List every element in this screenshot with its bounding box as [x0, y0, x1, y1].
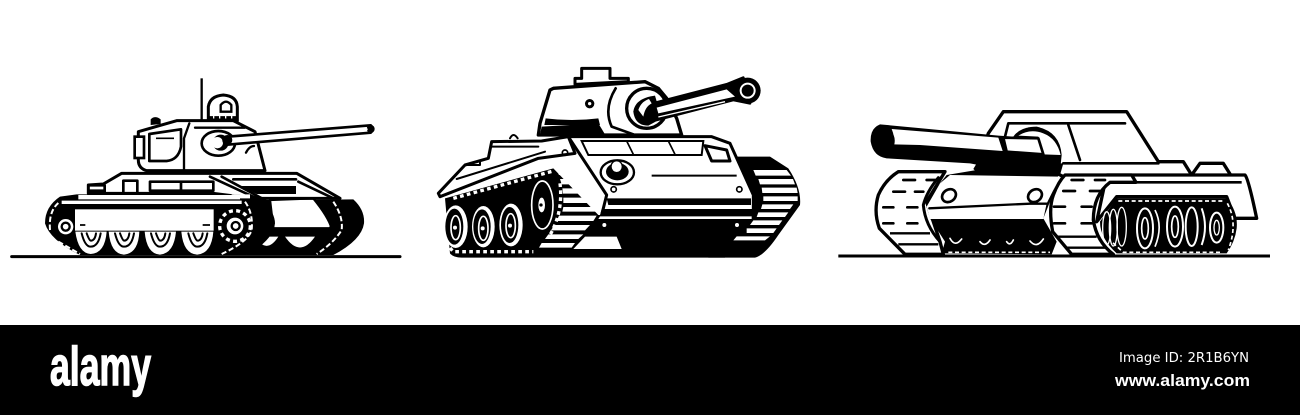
- side track links: [440, 171, 561, 252]
- drive sprocket: [532, 181, 553, 229]
- rear road wheels: [255, 237, 315, 247]
- white wedge under hull: [573, 237, 622, 249]
- side deck: [438, 135, 575, 197]
- tank 3: low tank destroyer with sloped superstructure: [838, 112, 1270, 256]
- mantlet: [627, 88, 667, 128]
- rear deck vent: [240, 186, 296, 194]
- right inner track: [1051, 175, 1136, 254]
- tank 2: three-quarter view heavy tank: [438, 68, 800, 258]
- rear track: [247, 199, 364, 255]
- hull deck: [88, 173, 340, 198]
- drive sprocket: [220, 211, 250, 241]
- gun and mantlet: [871, 124, 1062, 171]
- rear hull: [270, 198, 332, 228]
- right track: [708, 157, 800, 258]
- driver visor: [705, 146, 730, 161]
- cupola: [151, 95, 237, 125]
- glacis plate: [568, 137, 753, 233]
- idler wheel: [58, 219, 73, 234]
- centre track treads: [539, 170, 600, 248]
- front track: [45, 194, 275, 255]
- alamy logo: alamy: [50, 335, 151, 397]
- turret ring: [973, 163, 1063, 175]
- ground line: [838, 251, 1270, 260]
- footer band: [0, 325, 1300, 415]
- front hull: [923, 170, 1060, 254]
- turret: [538, 82, 682, 135]
- left track: [876, 172, 945, 254]
- ground line: [12, 252, 400, 261]
- hull machine gun ball: [601, 160, 634, 184]
- tank 1: side-view light tank on a ground line: [12, 78, 400, 257]
- website: www.alamy.com: [1114, 371, 1250, 390]
- road wheels: [444, 204, 523, 248]
- turret hatch and side plate: [135, 123, 245, 171]
- superstructure: [987, 112, 1232, 177]
- road wheels: [1103, 207, 1223, 248]
- gun mantlet: [202, 131, 254, 156]
- rear hull and wheel bay: [1097, 175, 1257, 253]
- front road wheels: [75, 232, 213, 255]
- side skirt panel: [75, 209, 214, 231]
- image id: Image ID: 2R1B6YN: [1119, 350, 1249, 366]
- turret cupola: [575, 68, 628, 84]
- gun barrel and muzzle: [653, 78, 761, 120]
- turret: [138, 121, 265, 171]
- deck hatches: [88, 177, 333, 200]
- gun barrel: [222, 125, 375, 145]
- lower hull: [445, 168, 745, 258]
- antenna: [198, 78, 205, 120]
